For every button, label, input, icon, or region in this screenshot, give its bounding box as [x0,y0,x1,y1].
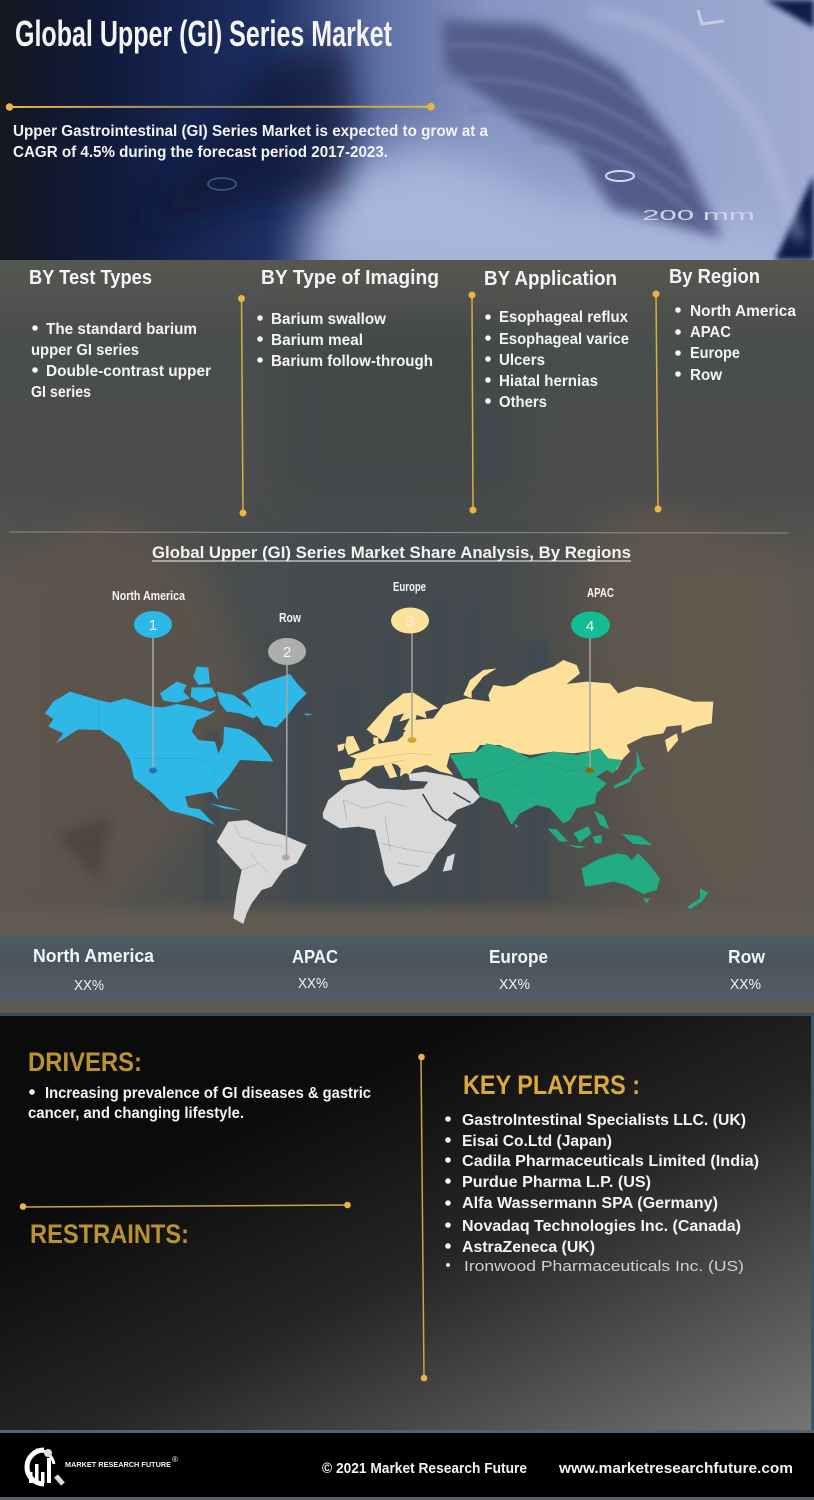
list: test types: Double-contrast upper [46,363,211,380]
header divider with gold dots [6,103,435,111]
connector: gold vertical line 2 [468,292,476,514]
intro text: Upper Gastrointestinal (GI) Series Market is expected to grow at a [13,123,488,140]
map pin 2: row: Row [279,610,302,625]
drivers text: cancer, and changing lifestyle. [28,1105,244,1122]
list: key players: Eisai Co.Ltd (Japan) [462,1133,612,1150]
footer logo [27,1449,178,1484]
map pin 3: europe: 3 [406,613,414,630]
list: key players: Alfa Wassermann SPA (Germany) [462,1195,718,1212]
panel: regional share values: XX% [298,975,328,992]
heading: by application: BY Application [484,268,617,290]
map pin 4: apac: 4 [586,618,594,635]
map: russia and north asia [400,660,713,777]
panel: regional share values: Europe [489,947,548,967]
list: regions: Row [690,367,723,384]
list: applications [485,309,629,411]
list: regions: APAC [690,324,731,341]
panel: regional share values: XX% [730,976,761,993]
list: key players: Purdue Pharma L.P. (US) [462,1174,651,1191]
footer copyright: © 2021 Market Research Future [322,1460,527,1477]
map: north america [45,667,313,825]
list: applications: Hiatal hernias [499,373,598,390]
list: key players: Ironwood Pharmaceuticals Inc. (US) [464,1258,744,1275]
header panel: chest x-ray background [0,0,814,260]
panel: regional share values: XX% [74,977,104,994]
x-ray marker text: 200 mm [642,207,755,224]
list: imaging types [257,311,433,370]
list: key players: Cadila Pharmaceuticals Limited (India) [462,1153,759,1170]
intro text [13,123,488,161]
map: africa and middle east [323,772,480,887]
list: test types [31,321,211,401]
list: regions [675,303,796,384]
list: key players: Novadaq Technologies Inc. (Canada) [462,1218,741,1235]
map: europe [337,693,448,781]
footer website: www.marketresearchfuture.com [558,1460,793,1477]
map pin 4: apac: APAC [587,585,614,600]
footer logo: ® [172,1455,178,1464]
map pin 2: row: 2 [283,644,291,661]
panel: regional share values: APAC [292,947,338,967]
list: applications: Esophageal varice [499,331,629,348]
list: applications: Others [499,394,547,411]
map section heading: Global Upper (GI) Series Market Share Analysis, By Regions [152,543,631,562]
map pin 3: europe: Europe [393,579,426,594]
drivers text: Increasing prevalence of GI diseases & gastric [45,1085,371,1102]
list: imaging types: Barium follow-through [271,353,433,370]
list: imaging types: Barium swallow [271,311,387,328]
footer logo: MARKET RESEARCH FUTURE [65,1460,171,1469]
list: applications: Esophageal reflux [499,309,628,326]
intro text: CAGR of 4.5% during the forecast period 2017-2023. [13,144,388,161]
list: imaging types: Barium meal [271,332,363,349]
heading: by region: By Region [669,266,760,288]
drivers text [28,1085,371,1122]
panel: regional share values: North America [33,946,155,966]
heading: key players: KEY PLAYERS : [463,1070,640,1100]
list: key players: GastroIntestinal Specialists LLC. (UK) [462,1112,746,1129]
heading: by test types: BY Test Types [29,267,152,289]
panel: regional share values [0,935,814,1001]
title: Global Upper (GI) Series Market [15,13,392,54]
world map [45,660,713,924]
map pin 4: apac [571,585,614,774]
connector: gold vertical line 3 [652,290,662,512]
panel: drivers, restraints and key players background [0,1016,814,1433]
list: regions: North America [690,303,796,320]
map: asia pacific [449,743,708,909]
list: applications: Ulcers [499,352,545,369]
panel: regional share values: XX% [499,976,530,993]
list: key players: AstraZeneca (UK) [462,1239,595,1256]
heading: by type of imaging: BY Type of Imaging [261,267,439,289]
footer bar [0,1433,814,1500]
map pin 1: north america: North America [112,588,186,603]
heading: drivers: DRIVERS: [28,1047,142,1077]
connector: key players vertical line [418,1054,427,1381]
map: south america [217,820,307,924]
list: regions: Europe [690,345,740,362]
map pin 3: europe [391,579,429,743]
map pin 2: row [268,610,306,860]
divider: drivers and restraints [20,1202,351,1210]
map pin 1: north america [112,588,186,774]
map pin 1: north america: 1 [149,617,157,634]
panel: segmentation and map background [0,260,814,1015]
panel: regional share values: Row [728,947,766,967]
heading: restraints: RESTRAINTS: [30,1219,189,1249]
list: key players [445,1112,759,1275]
list: test types: The standard barium [46,321,197,338]
connector: gold vertical line 1 [238,295,246,516]
list: test types: upper GI series [31,342,139,359]
list: test types: GI series [31,384,91,401]
